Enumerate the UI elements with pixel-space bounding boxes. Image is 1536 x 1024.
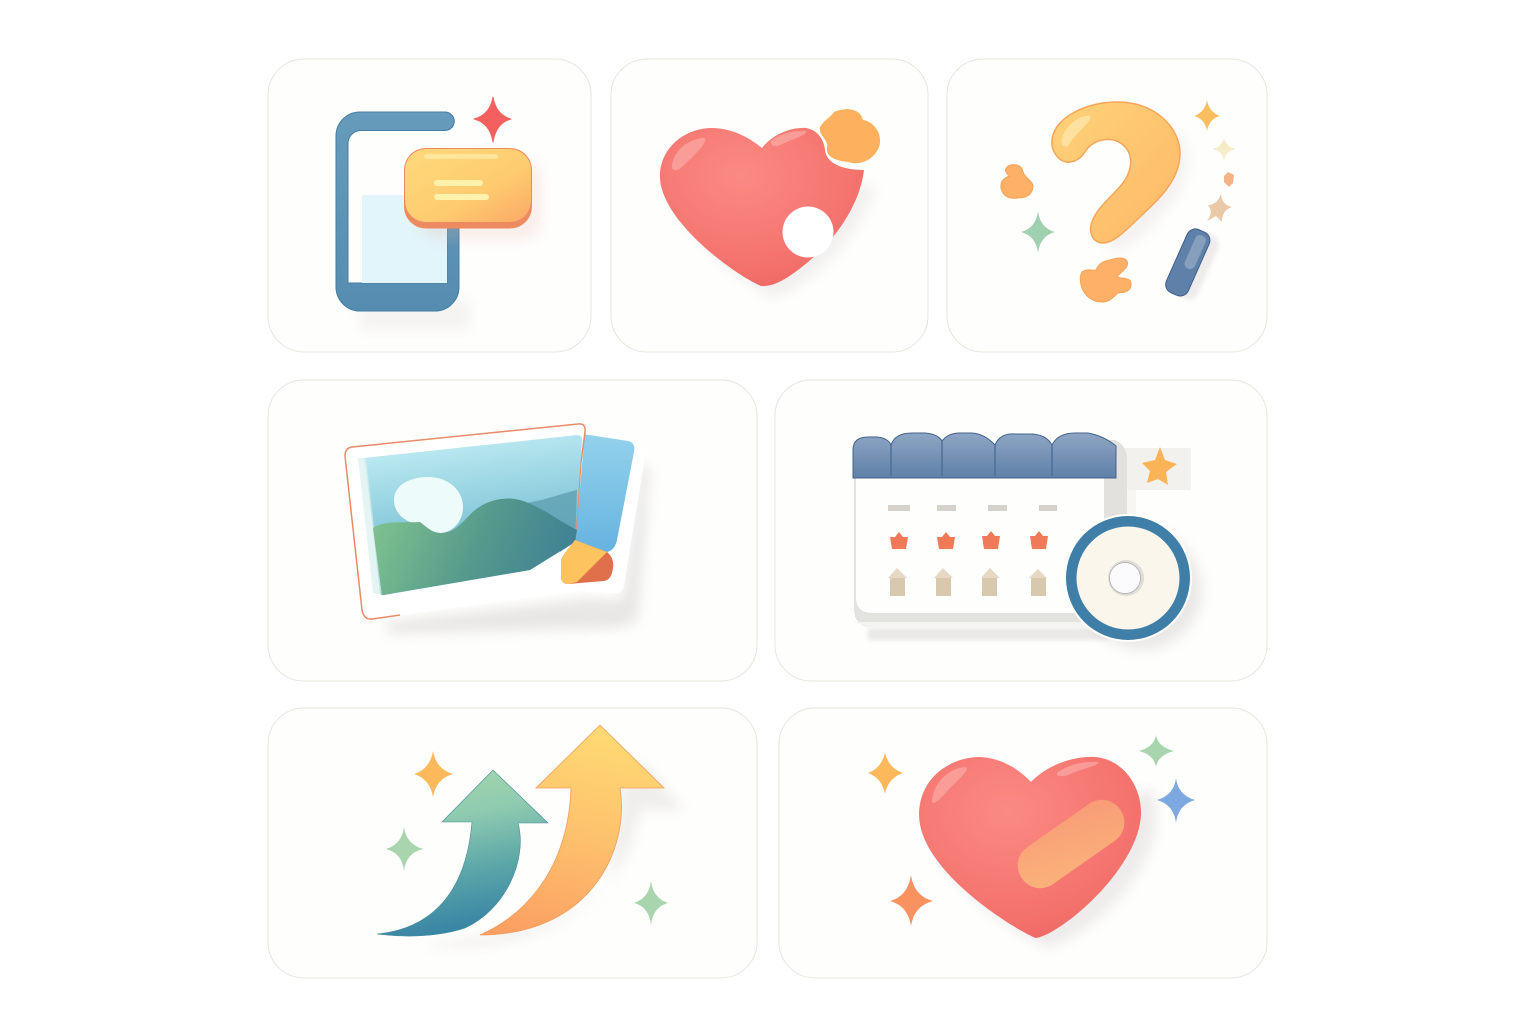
icon: star tag bbox=[1118, 447, 1191, 522]
icon: bandage bbox=[1009, 791, 1133, 897]
icon: sparkles bbox=[1021, 100, 1235, 253]
icon: orange blob left bbox=[1001, 165, 1033, 198]
icon: calendar bbox=[853, 433, 1127, 640]
icon: photo card bbox=[345, 424, 650, 634]
icon: orange blob bottom bbox=[1080, 258, 1131, 302]
house row bbox=[890, 578, 1046, 596]
panel: calendar bbox=[775, 380, 1267, 681]
icon: heart bbox=[919, 757, 1156, 948]
icon: red sparkle bbox=[474, 97, 511, 142]
star row bbox=[890, 531, 1048, 549]
icon: sparkles bbox=[868, 735, 1195, 926]
roof row bbox=[888, 568, 1047, 578]
icon: slate pill bbox=[1163, 226, 1222, 302]
panel: photo bbox=[268, 380, 757, 681]
panel: growth arrows bbox=[268, 708, 757, 978]
icon: phone with chat bubble bbox=[336, 112, 542, 330]
panel: question mark bbox=[947, 59, 1267, 352]
panel: heart with blob bbox=[611, 59, 928, 352]
icon: heart with white circle bbox=[660, 128, 875, 298]
panel: heart with bandage bbox=[779, 708, 1267, 978]
panel: phone message bbox=[268, 59, 591, 352]
icon: disc badge bbox=[1064, 514, 1202, 650]
icon: green arrow bbox=[377, 770, 548, 936]
dashes row bbox=[888, 505, 1057, 511]
icon: question mark bbox=[1052, 102, 1187, 252]
icon: orange arrow bbox=[480, 725, 664, 935]
icon: sparkles bbox=[386, 751, 668, 925]
icon: arrow shadow bbox=[420, 760, 685, 947]
icon: orange blob bbox=[820, 109, 880, 163]
